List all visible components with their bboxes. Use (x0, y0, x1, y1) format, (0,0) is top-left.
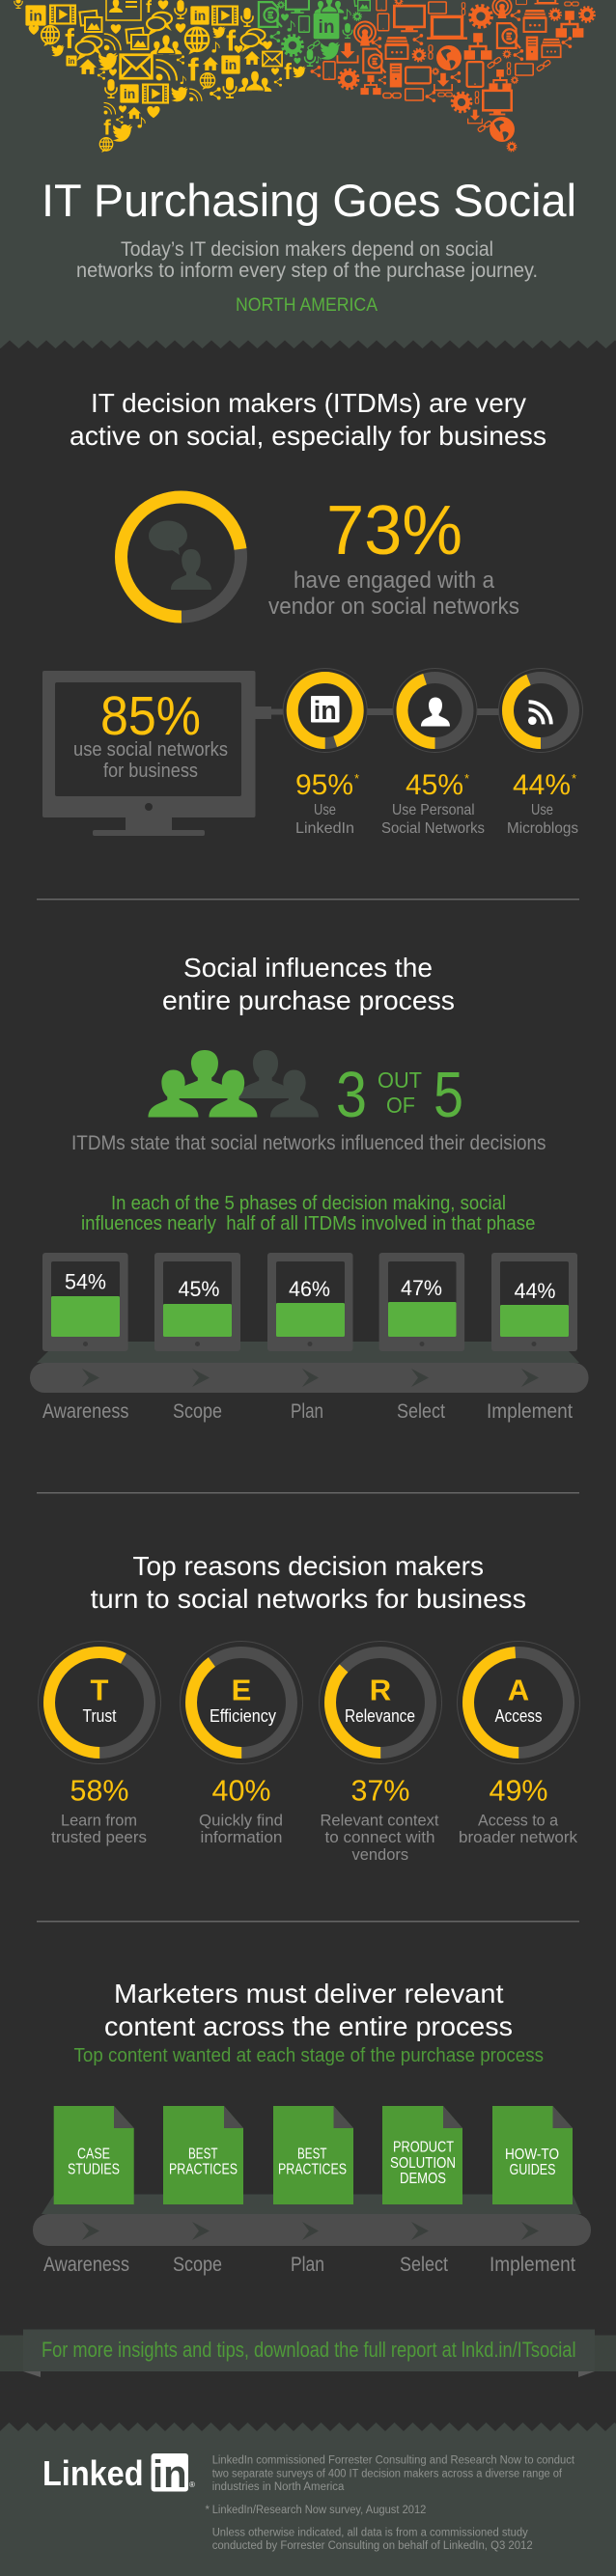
ring: personal networks 45% (393, 668, 477, 753)
icon cloud: yellow social speech bubble: f (187, 52, 199, 88)
document: how-to guides: GUIDES (510, 2162, 556, 2178)
stat: 95% use LinkedIn: * (354, 771, 359, 786)
phase labels: Implement (487, 1400, 573, 1423)
stat caption (268, 568, 519, 620)
stat: 44% microblogs (507, 769, 578, 837)
tablet bar: Implement 44%: 44% (514, 1279, 556, 1303)
stat: 49% access: 49% (489, 1774, 548, 1807)
heading: IT decision makers (ITDMs) are very (91, 388, 526, 418)
stat: 3 out of 5 (336, 1059, 463, 1131)
icon cloud: green centre icons: in (318, 17, 335, 38)
phase labels: Plan (291, 2254, 324, 2276)
phase labels: Select (397, 1400, 445, 1423)
ring: Efficiency 40% (180, 1641, 303, 1764)
document: how-to guides: HOW-TO (505, 2147, 559, 2163)
stat: 95% use LinkedIn: Use (314, 802, 336, 818)
LinkedIn logo: in (153, 2453, 187, 2496)
document: product solution demos: PRODUCT (393, 2139, 454, 2156)
phase labels: Select (400, 2254, 448, 2276)
stat: 44% microblogs: 44% (513, 769, 571, 801)
banner: report call to action (0, 2330, 616, 2377)
stat: 37% relevance: 37% (351, 1774, 409, 1807)
icon cloud: orange technology speech bubble (311, 0, 595, 152)
icon cloud: yellow social speech bubble: in (68, 57, 75, 66)
stat: 44% microblogs: Microblogs (507, 820, 578, 837)
icon cloud: yellow social speech bubble (14, 0, 306, 152)
stat: 37% relevance: to connect with (324, 1828, 434, 1846)
stat: 44% microblogs: Use (531, 802, 553, 818)
stat: 45% personal social networks: Use Personal (392, 802, 475, 818)
ring: Efficiency 40%: E (232, 1674, 251, 1706)
ring: Trust 58%: Trust (83, 1706, 116, 1726)
footnotes: LinkedIn/Research Now survey, August 2012 (212, 2505, 426, 2516)
green callout: In each of the 5 phases of decision making, social (111, 1193, 506, 1214)
stat: 49% access: Access to a (478, 1811, 559, 1830)
ring: Efficiency 40%: Efficiency (210, 1706, 276, 1726)
monitor: 85% (42, 671, 255, 836)
stat: 45% personal social networks: * (464, 771, 469, 786)
subtitle: networks to inform every step of the purchase journey. (76, 260, 538, 282)
heading: turn to social networks for business (91, 1584, 526, 1614)
heading: Top reasons decision makers (133, 1551, 484, 1581)
monitor: 85%: for business (103, 761, 198, 782)
document: best practices (163, 2106, 243, 2204)
footnotes (205, 2455, 575, 2552)
icon cloud: yellow social speech bubble: f (284, 59, 292, 84)
stat: 37% relevance: vendors (351, 1845, 408, 1864)
phase labels: Plan (291, 1400, 323, 1423)
icon cloud: yellow social speech bubble: in (225, 57, 237, 72)
document: best practices: BEST (188, 2147, 218, 2162)
document: product solution demos: SOLUTION (390, 2155, 456, 2172)
ring: LinkedIn 95%: in (314, 696, 337, 725)
heading: entire purchase process (162, 985, 455, 1015)
ring: Relevance 37% (319, 1641, 442, 1764)
stat: 3 out of 5: 5 (434, 1059, 463, 1131)
document: best practices: PRACTICES (169, 2162, 238, 2177)
tablet bar: Select 47%: 47% (401, 1276, 442, 1300)
stat: 40% efficiency: 40% (212, 1774, 270, 1807)
monitor: 85%: use social networks (73, 739, 228, 761)
stat: 45% personal social networks: Social Networks (381, 820, 485, 837)
document: product solution demos (382, 2106, 462, 2204)
tablet bar: Implement 44% (491, 1253, 577, 1351)
footnotes: LinkedIn commissioned Forrester Consulting and Research Now to conduct (212, 2455, 575, 2467)
tablet bar: Awareness 54%: 54% (65, 1270, 106, 1293)
phase labels: Scope (173, 1400, 222, 1423)
ring: Access 49%: Access (494, 1706, 543, 1726)
footer background (0, 2431, 616, 2576)
stat: 58% trust: trusted peers (51, 1828, 147, 1846)
subtitle (76, 238, 538, 282)
stat: 37% relevance (321, 1774, 439, 1864)
icon: five people, three highlighted (149, 1050, 319, 1118)
conveyor belt (33, 2195, 591, 2246)
header background (0, 0, 616, 349)
stat: 3 out of 5: OUT (378, 1067, 422, 1093)
tablet bar: Awareness 54% (42, 1253, 128, 1351)
ring: Trust 58% (39, 1641, 160, 1764)
ring: Trust 58%: T (91, 1674, 109, 1706)
LinkedIn logo: ® (189, 2480, 195, 2489)
footnotes: conducted by Forrester Consulting on behalf of LinkedIn, Q3 2012 (212, 2540, 533, 2552)
phase labels: Awareness (43, 2254, 129, 2276)
stat caption: vendor on social networks (268, 594, 519, 620)
stat: 95% use LinkedIn: LinkedIn (295, 820, 354, 837)
stat: 40% efficiency: information (201, 1828, 282, 1846)
stat: 44% microblogs: * (572, 771, 576, 786)
icon cloud: yellow social speech bubble: f (65, 24, 74, 55)
phase labels: Scope (173, 2254, 222, 2276)
footnotes: Unless otherwise indicated, all data is from a commissioned study (212, 2528, 528, 2539)
stat: 3 out of 5: OF (386, 1093, 415, 1118)
heading: content across the entire process (104, 2011, 513, 2041)
ring: Access 49%: A (508, 1674, 529, 1706)
icon cloud: green centre icons (259, 0, 370, 66)
heading: Social influences the (183, 953, 433, 983)
tablet bar: Plan 46%: 46% (289, 1277, 330, 1301)
stat: 40% efficiency: Quickly find (199, 1811, 283, 1830)
heading: active on social, especially for business (70, 421, 546, 451)
document: best practices: BEST (297, 2147, 327, 2162)
green callout: influences nearly half of all ITDMs involved in that phase (81, 1213, 535, 1234)
ring: Relevance 37%: R (370, 1674, 391, 1706)
tablet bar: Scope 45%: 45% (178, 1277, 220, 1301)
section: ITDMs active on social (42, 388, 583, 837)
heading (104, 1979, 513, 2041)
heading (162, 953, 455, 1015)
icon cloud: yellow social speech bubble: in (29, 9, 42, 25)
ring: Relevance 37%: Relevance (345, 1706, 415, 1726)
stat: 58% trust: 58% (70, 1774, 129, 1807)
footnotes: two separate surveys of 400 IT decision makers across a diverse range of (212, 2468, 563, 2479)
caption: ITDMs state that social networks influenced their decisions (71, 1132, 546, 1154)
green subheading: Top content wanted at each stage of the purchase process (73, 2045, 544, 2066)
document: best practices: PRACTICES (278, 2162, 347, 2177)
conveyor belt (30, 1342, 589, 1393)
document: case studies: STUDIES (68, 2162, 120, 2177)
zigzag edge: footer (0, 2423, 616, 2431)
phase labels: Awareness (42, 1400, 129, 1423)
footnotes: * (205, 2505, 210, 2516)
stat: 95% use LinkedIn (295, 769, 359, 837)
stat: 49% access: broader network (459, 1828, 578, 1846)
stat: 3 out of 5: 3 (336, 1059, 367, 1131)
stat: 40% efficiency (199, 1774, 283, 1846)
phase labels (43, 2254, 575, 2276)
heading: Marketers must deliver relevant (114, 1979, 504, 2008)
stat: 73%: 73% (326, 492, 462, 569)
phase labels (42, 1400, 573, 1423)
ring: microblogs 44% (498, 668, 583, 753)
title: IT Purchasing Goes Social (42, 175, 576, 226)
green callout (81, 1193, 535, 1234)
subtitle: Today’s IT decision makers depend on social (121, 238, 493, 261)
ring: LinkedIn 95% (283, 668, 367, 753)
tablet bar: Select 47% (379, 1253, 464, 1351)
monitor: 85%: 85% (100, 685, 201, 747)
stat: 45% personal social networks (381, 769, 485, 837)
tablet bar: Scope 45% (154, 1253, 240, 1351)
stat: 58% trust: Learn from (61, 1811, 137, 1830)
region label: NORTH AMERICA (236, 295, 378, 316)
icon cloud: yellow social speech bubble: in (194, 8, 206, 23)
stat: 37% relevance: Relevant context (321, 1811, 439, 1830)
document: best practices (273, 2106, 353, 2204)
document: case studies: CASE (77, 2147, 110, 2162)
phase labels: Implement (490, 2254, 575, 2276)
icon cloud: yellow social speech bubble: in (124, 86, 135, 101)
section: marketers must deliver relevant content (33, 1979, 591, 2276)
icon cloud: yellow social speech bubble: f (226, 25, 237, 57)
stat caption: have engaged with a (294, 568, 495, 594)
document: how-to guides (492, 2106, 573, 2204)
stat: 49% access (459, 1774, 578, 1846)
heading (70, 388, 546, 451)
stat: 45% personal social networks: 45% (406, 769, 463, 801)
zigzag edge: header (0, 340, 616, 348)
stat: 95% use LinkedIn: 95% (295, 769, 353, 801)
document: product solution demos: DEMOS (400, 2171, 446, 2187)
footnotes: industries in North America (212, 2481, 345, 2493)
ring: Access 49% (458, 1641, 579, 1764)
document: case studies (54, 2106, 134, 2204)
connector cables (255, 706, 504, 719)
icon cloud: yellow social speech bubble: f (103, 116, 111, 140)
stat: 58% trust (51, 1774, 147, 1846)
LinkedIn logo: Linked (42, 2453, 143, 2493)
LinkedIn logo (42, 2453, 195, 2496)
section: top reasons (39, 1551, 579, 1864)
section: social influences the purchase process (30, 953, 589, 1423)
tablet bar: Plan 46% (267, 1253, 353, 1351)
donut: 73% engaged (122, 497, 241, 617)
heading (91, 1551, 526, 1614)
